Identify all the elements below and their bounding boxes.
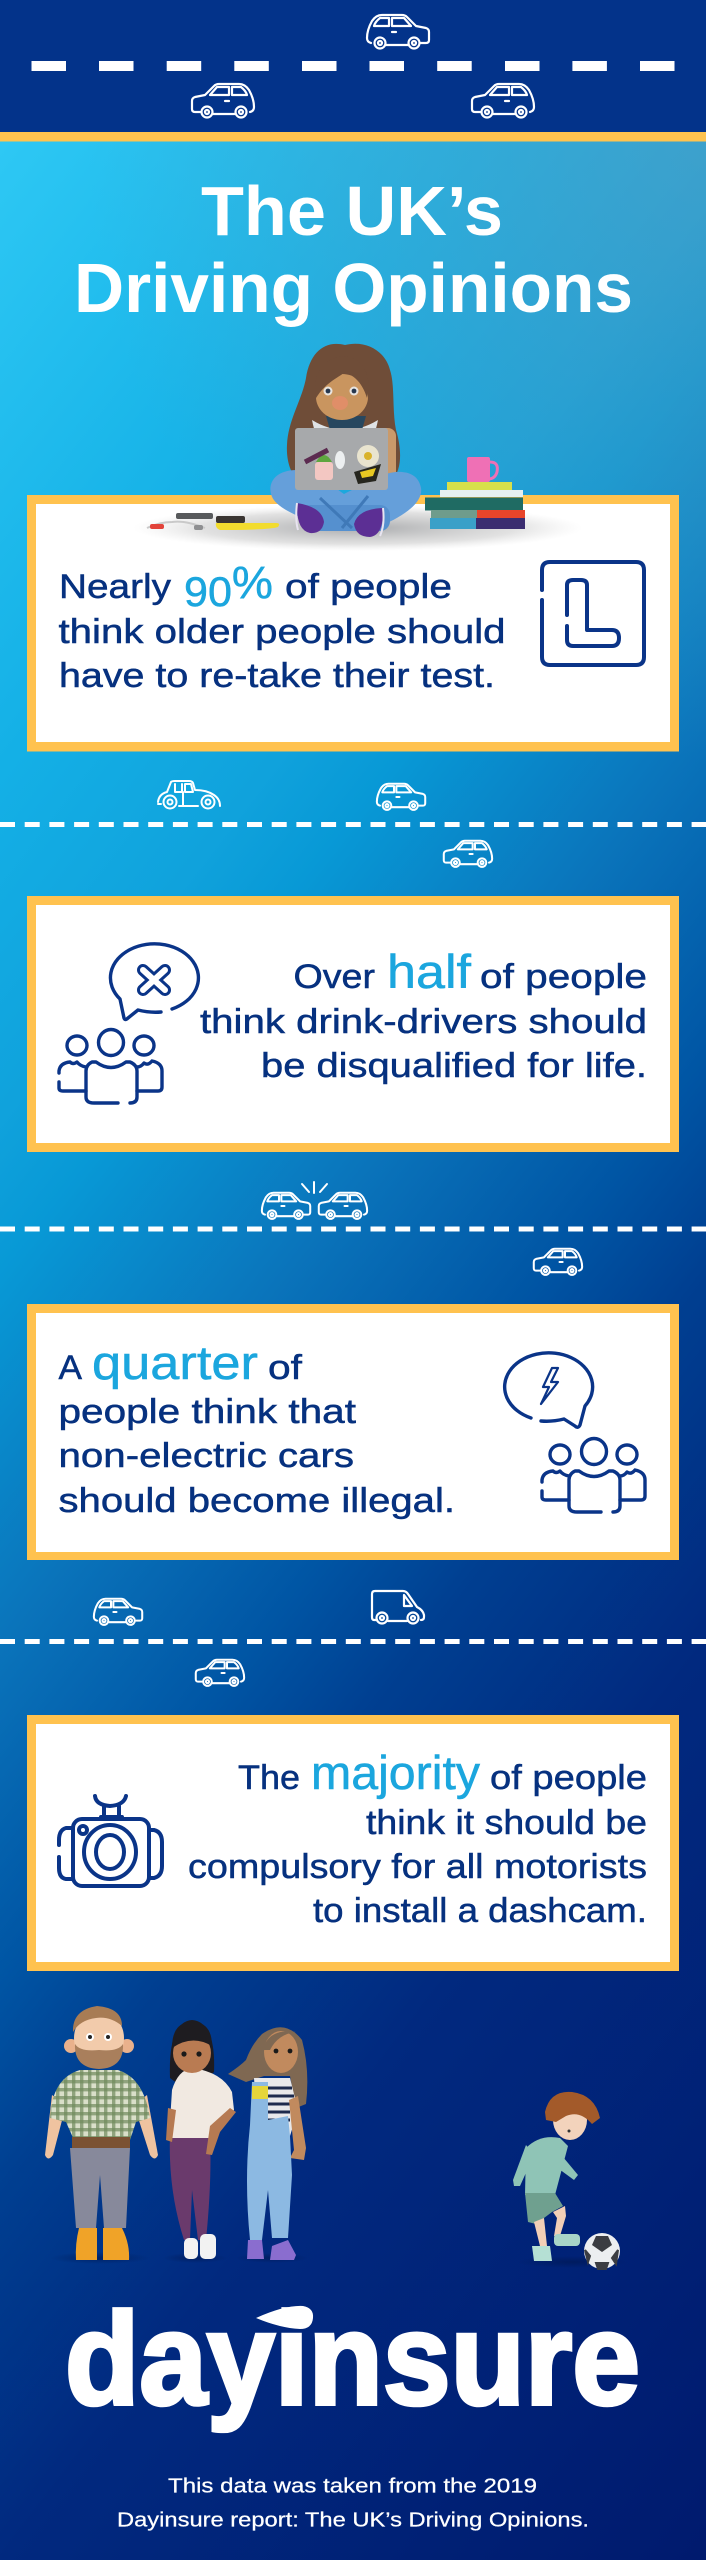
- icon: learner L plate: [542, 562, 644, 665]
- speech bubble: [505, 1353, 593, 1427]
- face: [316, 374, 368, 420]
- cross: [143, 970, 165, 990]
- statistic text: think older people should: [58, 613, 506, 651]
- shoes: [184, 2238, 198, 2259]
- head: [553, 2100, 587, 2140]
- statistic text: half: [387, 945, 472, 998]
- icon: car top lane: [367, 15, 429, 48]
- people group: [59, 1030, 162, 1103]
- ball: [584, 2233, 620, 2269]
- legs denim: [270, 470, 421, 530]
- boots: [76, 2228, 97, 2260]
- icon: car above panel three: [534, 1249, 582, 1275]
- laptop: [295, 428, 388, 490]
- statistic text: non-electric cars: [58, 1437, 354, 1475]
- illustration: man: [45, 2006, 158, 2264]
- header road band: [0, 0, 706, 142]
- shoes purple: [297, 503, 324, 533]
- people group: [542, 1438, 645, 1512]
- road marking 1: [0, 822, 706, 827]
- panel: dashcams: [27, 1715, 679, 1971]
- source note: [117, 2474, 589, 2532]
- source note: This data was taken from the 2019: [168, 2474, 537, 2498]
- striped top: [254, 2078, 298, 2136]
- statistic text: think it should be: [366, 1804, 647, 1842]
- illustration: desk items: [147, 513, 279, 530]
- road marking 2: [0, 1226, 706, 1232]
- overalls: [247, 2082, 292, 2240]
- icon: car lower lane right: [472, 84, 534, 118]
- statistic text: [188, 1746, 647, 1930]
- statistic text: compulsory for all motorists: [188, 1848, 647, 1886]
- statistic text: majority: [311, 1746, 481, 1799]
- statistic text: Over: [294, 958, 375, 996]
- statistic text: think drink-drivers should: [200, 1003, 647, 1041]
- statistic text: of people: [480, 958, 647, 996]
- illustration: boy with football: [513, 2092, 627, 2269]
- icon: two cars colliding: [262, 1182, 367, 1219]
- shirt: [50, 2070, 150, 2140]
- hair back: [287, 344, 400, 480]
- source note: Dayinsure report: The UK’s Driving Opinions.: [117, 2508, 589, 2532]
- panel: older drivers: [27, 495, 679, 752]
- logo: dayinsure wordmark: dayinsure: [65, 2285, 640, 2432]
- trousers: [70, 2148, 130, 2228]
- title: The UK’s: [201, 172, 503, 250]
- floor shadow: [133, 505, 583, 551]
- white top: [169, 2068, 234, 2138]
- icon: car below third line: [196, 1660, 244, 1686]
- statistic text: [58, 557, 506, 695]
- title: [74, 172, 633, 327]
- sweater: [525, 2137, 568, 2195]
- legs: [534, 2218, 547, 2246]
- face: [173, 2033, 211, 2073]
- belt: [72, 2137, 130, 2148]
- statistic text: [200, 945, 647, 1085]
- head: [64, 2039, 78, 2053]
- road marking 3: [0, 1639, 706, 1644]
- statistic text: of people: [285, 568, 452, 606]
- road centre dashes: [32, 61, 674, 71]
- statistic text: %: [232, 557, 273, 608]
- icon: group with lightning speech bubble: [505, 1353, 645, 1512]
- arms: [45, 2095, 66, 2158]
- icon: vintage car: [158, 781, 220, 808]
- statistic text: have to re-take their test.: [59, 657, 495, 695]
- hair back: [170, 2020, 214, 2084]
- shorts: [525, 2193, 563, 2224]
- icon: dashcam: [59, 1796, 162, 1886]
- headphones and top: [312, 420, 378, 439]
- statistic text: people think that: [58, 1393, 356, 1431]
- statistic text: quarter: [92, 1336, 258, 1389]
- statistic text: A: [58, 1349, 82, 1387]
- statistic text: 90: [184, 568, 232, 615]
- illustration: mug and stack of books: [425, 457, 525, 529]
- panel: non-electric cars: [27, 1304, 679, 1560]
- shoes: [247, 2240, 264, 2259]
- shoes: [532, 2246, 552, 2261]
- icon: car lane four: [94, 1599, 142, 1625]
- leggings: [170, 2135, 210, 2240]
- arm: [289, 2096, 306, 2160]
- laptop stickers: [315, 462, 333, 480]
- illustration: woman with dark hair: [163, 2020, 236, 2263]
- torso: [322, 428, 396, 480]
- illustration: woman in denim overalls: [228, 2027, 308, 2263]
- statistic text: [58, 1336, 455, 1520]
- face: [264, 2031, 298, 2073]
- statistic text: The: [238, 1759, 300, 1797]
- icon: car lower lane left: [192, 84, 254, 118]
- statistic text: of people: [490, 1759, 647, 1797]
- statistic text: of: [268, 1349, 302, 1387]
- icon: group with cross speech bubble: [59, 944, 198, 1103]
- title: Driving Opinions: [74, 249, 633, 327]
- statistic text: Nearly: [59, 568, 172, 606]
- arms: [513, 2145, 534, 2186]
- arm: [206, 2108, 236, 2155]
- icon: car above first line: [377, 784, 425, 810]
- logo drop accent: [256, 2306, 313, 2329]
- hair: [228, 2027, 307, 2108]
- illustration: girl with laptop: [270, 344, 421, 537]
- icon: car below first line: [444, 841, 492, 867]
- lightning bolt: [541, 1368, 558, 1404]
- panel: drink drivers: [27, 896, 679, 1152]
- statistic text: to install a dashcam.: [313, 1892, 647, 1930]
- statistic text: should become illegal.: [58, 1482, 455, 1520]
- statistic text: be disqualified for life.: [261, 1047, 647, 1085]
- speech bubble: [110, 944, 198, 1020]
- icon: van: [372, 1591, 424, 1624]
